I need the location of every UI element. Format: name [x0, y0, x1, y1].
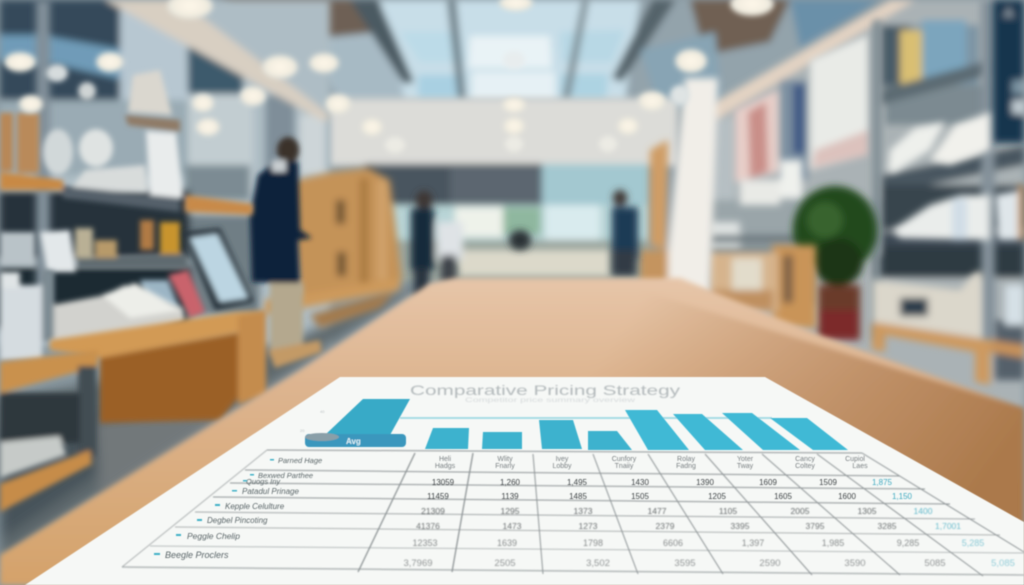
pricing document: [25, 377, 1024, 585]
table values row 2: 1605: [774, 492, 792, 501]
tablet on stand: [140, 228, 254, 318]
shelf posts: [36, 0, 995, 345]
bar chart: 40: [320, 409, 325, 414]
table row labels: Beegle Proclers: [165, 550, 229, 560]
floor: [0, 285, 420, 560]
left wall with shelving background: [0, 0, 330, 345]
table values row 2: 1485: [569, 492, 587, 501]
table values row 5: 1639: [497, 538, 517, 548]
person: center right: [612, 190, 638, 276]
table values row 3: 1400: [914, 506, 933, 516]
wooden display shelving: [265, 168, 402, 328]
table values row 1: 1,260: [500, 478, 521, 487]
table values row 3: [421, 506, 933, 516]
table column headers: Heli: [439, 456, 451, 463]
wooden counter: [50, 310, 266, 423]
table values row 5: 6606: [663, 538, 683, 548]
table column headers: Ivey: [556, 456, 569, 463]
table values row 1: 1,875: [872, 478, 893, 487]
left shelves with goods: [0, 70, 253, 272]
table column headers: Wlity: [497, 456, 513, 463]
bar chart: 20: [300, 428, 305, 433]
table row labels: Quogs Iny: [246, 477, 281, 486]
ceiling and skylight: [180, 0, 880, 110]
table values row 5: [412, 538, 984, 548]
table values row 4: [416, 521, 961, 531]
plant in pot: [793, 186, 877, 340]
center counter: [458, 250, 610, 276]
chart legend pill: Avg: [346, 437, 361, 446]
table values row 6: 3595: [674, 558, 696, 569]
table grid: [122, 450, 1024, 576]
table values row 4: 1473: [503, 521, 522, 531]
table values row 4: 2379: [656, 521, 675, 531]
table values row 6: 3,502: [586, 558, 610, 569]
table values row 4: 1,7001: [935, 521, 961, 531]
table values row 6: 3590: [844, 558, 866, 569]
table values row 3: 1373: [574, 506, 593, 516]
table column headers: Cancy: [795, 456, 815, 463]
table values row 1: 1509: [819, 478, 837, 487]
lower left wooden shelves: [0, 350, 98, 512]
table values row 1: 1609: [759, 478, 777, 487]
table column headers: Hadgs: [435, 463, 456, 470]
table values row 1: 1,495: [567, 478, 588, 487]
white pillar: [640, 78, 718, 295]
table values row 4: 3395: [731, 521, 750, 531]
table values row 2: 1505: [631, 492, 649, 501]
table row labels: Bexwed Parthee: [258, 471, 313, 480]
table values row 1: 1430: [631, 478, 649, 487]
table column headers: Cupiol: [845, 456, 865, 463]
table values row 3: 1295: [501, 506, 520, 516]
table column headers: Coltey: [795, 463, 815, 470]
pillows on right shelf: [888, 112, 1024, 240]
table values row 3: 1305: [858, 506, 877, 516]
table values row 5: 1,985: [822, 538, 844, 548]
paper sheet: [25, 377, 1024, 585]
table values row 5: 5,285: [962, 538, 984, 548]
table values row 2: [427, 492, 913, 501]
table values row 4: 41376: [416, 521, 440, 531]
table row labels: Patadul Prinage: [242, 487, 299, 496]
table row labels: Kepple Celulture: [225, 502, 285, 511]
table row labels: Peggle Chelip: [187, 531, 240, 541]
table values row 6: 5085: [924, 558, 946, 569]
table values row 5: 1,397: [742, 538, 764, 548]
chart legend pill: [305, 433, 406, 447]
table row labels: Parned Hage: [278, 456, 322, 465]
table column headers: Laes: [852, 463, 868, 470]
table values row 6: 2590: [759, 558, 781, 569]
document title: Competitor price summary overview: [465, 398, 636, 404]
person: foreground man in dark coat: [250, 137, 322, 368]
table column headers: [435, 456, 868, 470]
table values row 1: [432, 478, 893, 487]
table column headers: Cunfory: [612, 456, 637, 463]
document title: Comparative Pricing Strategy: [410, 382, 680, 398]
table values row 6: 2505: [494, 558, 516, 569]
table column headers: Fadng: [676, 463, 696, 470]
printer and wooden stand: [872, 272, 1024, 385]
table values row 2: 11459: [427, 492, 449, 501]
table values row 2: 1600: [838, 492, 856, 501]
ceiling lights: [4, 0, 774, 153]
right wall with shelving: [705, 0, 1024, 410]
table column headers: Tway: [737, 463, 754, 470]
table values row 6: 5,085: [991, 558, 1015, 569]
wooden crates on right: [708, 245, 816, 328]
document title: [410, 382, 680, 404]
table values row 3: 1477: [648, 506, 667, 516]
table column headers: Rolay: [677, 456, 695, 463]
table values row 1: 13059: [432, 478, 455, 487]
table values row 6: 3,7969: [403, 558, 433, 569]
table values row 6: [403, 558, 1015, 569]
table values row 5: 9,285: [897, 538, 919, 548]
table column headers: Fnarly: [495, 463, 515, 470]
table row labels: Degbel Pincoting: [207, 516, 268, 525]
table values row 4: 3795: [806, 521, 825, 531]
person: center left: [411, 191, 531, 298]
table row labels: [165, 456, 322, 560]
table values row 2: 1139: [501, 492, 519, 501]
table values row 1: 1390: [696, 478, 714, 487]
table column headers: Lobby: [552, 463, 572, 470]
table values row 3: 2005: [791, 506, 810, 516]
table values row 4: 1273: [579, 521, 598, 531]
navy sign: A: [1004, 5, 1014, 21]
paper stack and jug: [0, 270, 185, 360]
table values row 3: 21309: [421, 506, 445, 516]
table values row 5: 1798: [583, 538, 603, 548]
back wall: [328, 98, 678, 282]
bar chart: [300, 399, 848, 450]
wooden table: [0, 278, 1024, 585]
table values row 3: 1105: [719, 506, 737, 516]
table column headers: Yoter: [737, 456, 754, 463]
table values row 2: 1205: [708, 492, 726, 501]
table values row 4: 3285: [878, 521, 897, 531]
table values row 2: 1,150: [892, 492, 913, 501]
navy sign: [993, 0, 1024, 143]
table values row 5: 12353: [412, 538, 438, 548]
table column headers: Tnaiiy: [615, 463, 634, 470]
table row markers: [154, 459, 274, 555]
posters on right wall: [708, 35, 878, 248]
